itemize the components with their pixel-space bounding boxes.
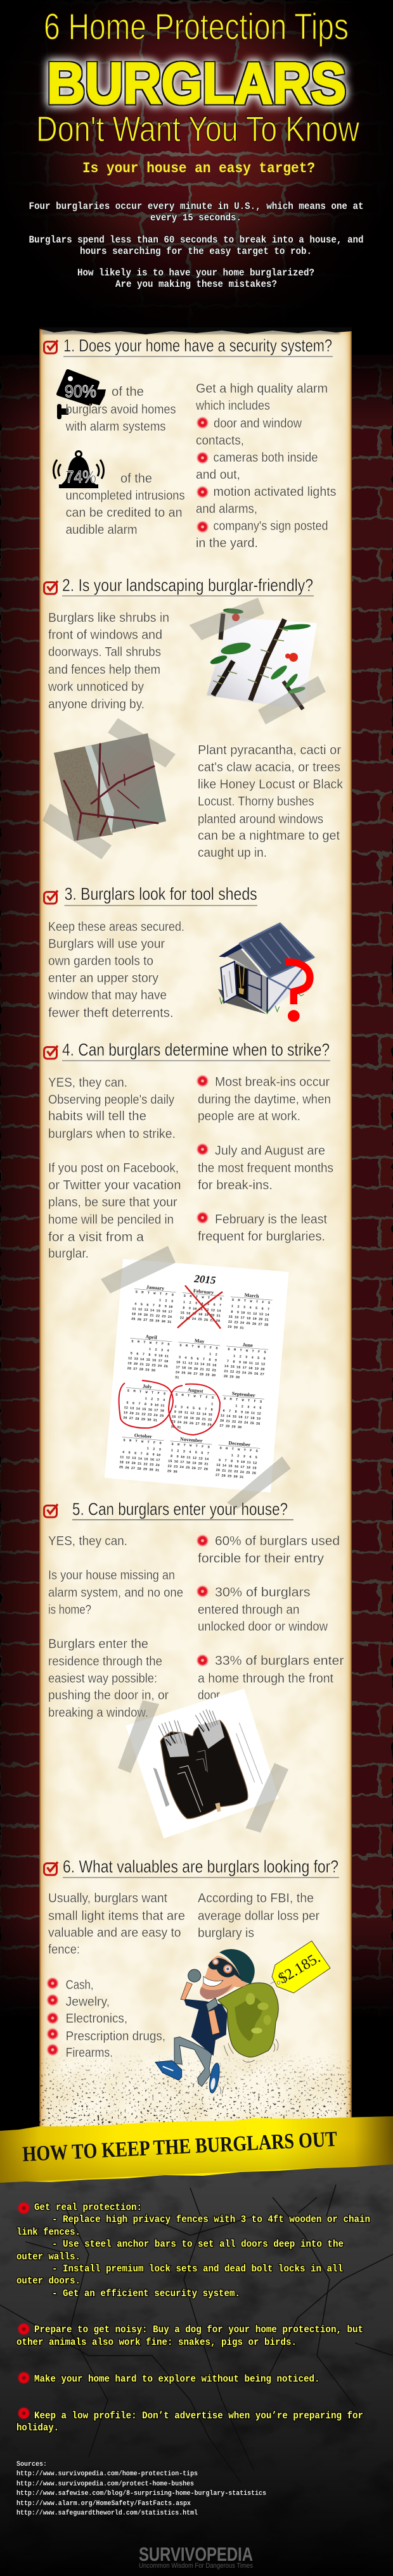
stat text: uncompleted intrusions: audible alarm [66,523,138,537]
text: plant pyracantha: can be a nightmare to get [198,829,340,843]
months row 1: 15 16 17 18 19 20 21 [178,1311,221,1318]
text: shrubs [48,611,169,712]
text: FBI average loss [198,1891,319,1940]
list: valuables: Electronics, [66,2012,127,2026]
title word: BURGLARS: BURGLARS [47,51,346,116]
list: valuables: Firearms. [66,2046,113,2060]
months row 1: S M T W T F S [131,1290,174,1297]
months row 2: June [242,1342,254,1348]
list: alarm features: motion activated lights [213,485,336,499]
months row 4: November [180,1436,203,1444]
tip 4: low profile [16,2407,363,2434]
heading 5: 5. Can burglars enter your house? [72,1500,288,1518]
months row 1: 22 23 24 25 26 27 28 [226,1320,268,1327]
list: alarm features: cameras both inside [213,451,318,465]
list: alarm features: in the yard. [196,536,258,550]
list: break-in timing: July and August are [215,1144,325,1158]
months row 1: 8 9 10 11 12 13 14 [227,1310,270,1317]
list: entry statistics: a home through the front [198,1672,333,1686]
tip 1: real protection: outer walls. [16,2251,81,2263]
months row 3: 26 27 28 29 30 31 [121,1416,157,1423]
tip 4: low profile: Keep a low profile: Don’t advertise when you’re preparing for [34,2410,363,2421]
months row 3 [120,1382,265,1436]
tape: lock pick right [246,1763,288,1833]
text: how burglars enter [48,1534,183,1720]
tip 2: get noisy: Prepare to get noisy: Buy a dog for your home protection, but [34,2324,363,2335]
months row 2: 19 20 21 22 23 24 25 [126,1361,168,1368]
months row 3: 16 17 18 19 20 21 22 [169,1415,212,1422]
text: shrubs: front of windows and [48,628,162,642]
months row 4: S M T W T F S [216,1446,259,1453]
text: yes they can: home will be penciled in [48,1213,174,1227]
months row 3: S M T W T F S [171,1392,214,1400]
intro text: Are you making these mistakes? [115,279,277,290]
text: how burglars enter: breaking a window. [48,1706,148,1720]
months row 4: 15 16 17 18 19 20 21 [166,1459,209,1467]
months row 3: September [232,1391,255,1398]
list: valuables: Jewelry, [66,1995,110,2009]
months row 2 [125,1332,269,1387]
text: tool sheds: own garden tools to [48,954,153,968]
text: how burglars enter: residence through the [48,1655,162,1669]
months row 2: 26 27 28 29 30 [125,1367,155,1373]
text: how burglars enter: YES, they can. [48,1534,127,1548]
months row 2: April [145,1334,158,1341]
months row 4: 18 19 20 21 22 23 24 [117,1460,160,1467]
panel: section 3 tool sheds [44,884,314,1022]
logo: Survivopedia [139,2543,253,2570]
months row 1: 1 2 3 4 5 6 7 [179,1300,221,1308]
intro text: Four burglaries occur every minute in U.S., which means one at [29,201,364,212]
months row 2: 31 [173,1375,179,1380]
logo: Survivopedia: SURVIVOPEDIA [139,2543,253,2565]
text: tool sheds: Burglars will use your [48,937,165,951]
heading 3: 3. Burglars look for tool sheds [65,884,257,904]
months row 1: 22 23 24 25 26 27 28 [177,1316,220,1323]
months row 4: 29 30 [165,1469,177,1474]
text: yes they can: plans, be sure that your [48,1196,177,1209]
months row 2: 5 6 7 8 9 10 11 [126,1351,169,1358]
stat text: burglars avoid homes [65,385,176,434]
months row 1: February [193,1288,214,1296]
photo: lock pick set [126,1689,279,1838]
months row 1: 8 9 10 11 12 13 14 [179,1306,221,1313]
months row 1: 25 26 27 28 29 30 31 [129,1317,172,1324]
months row 1: 29 30 31 [226,1325,244,1330]
months row 3: 1 [171,1399,214,1406]
text: plant pyracantha: planted around windows [198,812,323,826]
panel: section 5 entering the house [44,1500,344,1838]
months row 3: 20 21 22 23 24 25 26 [218,1418,261,1426]
list: valuables: Cash, [66,1978,94,1992]
panel: section 1 security system [44,336,336,550]
tape: plant photo bottom [258,676,326,724]
panel: section 6 valuables [39,1857,352,2140]
tip 2: get noisy [16,2323,363,2348]
price tag [272,1941,330,1993]
sources list: http://www.safewise.com/blog/8-surprising-home-burglary-statistics [16,2490,266,2497]
text: plant pyracantha [198,743,344,860]
logo: Survivopedia: Uncommon Wisdom For Dangerous Times [139,2562,253,2570]
list: entry statistics: unlocked door or window [198,1620,328,1634]
months row 4: October [134,1432,153,1439]
months row 1: S M T W T F S [179,1294,222,1301]
list: entry statistics: 33% of burglars enter [215,1654,344,1668]
photo: thorn branch [54,733,166,841]
tip 1: real protection: - Install premium lock sets and dead bolt locks in all [52,2263,343,2275]
banner heading: HOW TO KEEP THE BURGLARS OUT [22,2128,338,2166]
months row 3: 19 20 21 22 23 24 25 [121,1411,164,1418]
months row 2: S M T W T F S [176,1343,219,1351]
months row 3: 1 2 3 4 5 [219,1403,262,1410]
months row 4: S M T W T F S [119,1438,162,1446]
list: valuables: Prescription drugs, [66,2030,165,2043]
heading 6: 6. What valuables are burglars looking for? [63,1857,338,1876]
list: break-in timing: during the daytime, when [198,1093,331,1107]
tape: thorn photo top [108,718,176,767]
stat text: burglars avoid homes: burglars avoid homes [66,403,176,417]
text: how burglars enter: alarm system, and no one [48,1586,183,1600]
heading 4: 4. Can burglars determine when to strike? [62,1040,330,1059]
price tag: $2.185. [276,1950,323,1987]
months row 2: 1 2 3 4 5 6 [223,1353,266,1361]
tape: lock pick left [118,1700,159,1773]
months row 3: 6 7 8 9 10 11 12 [219,1408,261,1416]
intro text: How likely is to have your home burglarized? [77,267,314,279]
tape: plant photo top [189,598,264,640]
stat text: uncompleted intrusions: can be credited to an [66,506,183,520]
list: entry statistics: entered through an [198,1603,299,1617]
intro text: every 15 seconds. [150,212,242,224]
intro text [29,201,364,290]
text: how burglars enter: pushing the door in, or [48,1688,169,1702]
tip 1: real protection: - Replace high privacy fences with 3 to 4ft wooden or chain [52,2214,370,2225]
text: how burglars enter: is home? [48,1603,91,1617]
months row 4: 8 9 10 11 12 13 14 [166,1454,209,1462]
stat text: uncompleted intrusions [66,472,185,537]
tip 4: low profile: holiday. [16,2422,59,2434]
months row 3: 27 28 29 30 [217,1424,242,1429]
tip 2: get noisy: other animals also work fine: snakes, pigs or birds. [16,2337,297,2348]
stat: 74%: 74% [65,467,96,486]
months row 2: 1 2 3 4 [127,1346,170,1353]
tip 1: real protection [16,2202,370,2299]
text: plant pyracantha: cat's claw acacia, or trees [198,761,340,774]
months row 2: S M T W T F S [224,1347,267,1354]
months row 1: 15 16 17 18 19 20 21 [226,1315,269,1322]
months row 4: S M T W T F S [167,1442,210,1449]
tip 1: real protection: link fences. [16,2226,81,2238]
months row 2: 24 25 26 27 28 29 30 [173,1370,216,1378]
months row 1: S M T W T F S [228,1297,271,1305]
months row 4: 1 2 3 4 5 6 7 [167,1448,209,1456]
list: entry statistics: door [198,1688,220,1702]
red circle around August [169,1384,220,1435]
months row 4: 1 2 3 [119,1444,161,1451]
sources list [16,2461,266,2517]
text: shrubs: Burglars like shrubs in [48,611,169,625]
text: yes they can: If you post on Facebook, [48,1161,179,1175]
months row 1: March [244,1292,259,1299]
panel: section 2 landscaping [42,575,344,860]
heading 2: 2. Is your landscaping burglar-friendly? [62,575,313,595]
tip 1: real protection: - Get an efficient security system. [52,2288,240,2299]
banner: yellow tape [0,2116,393,2183]
text: yes they can: for a visit from a [48,1230,145,1244]
text: plant pyracantha: caught up in. [198,846,267,860]
months row 1: 1 2 3 4 5 6 7 [227,1304,269,1311]
panel: header title block [29,6,364,290]
months row 4: 1 2 3 4 5 [215,1453,257,1460]
text: yes they can: burglars when to strike. [48,1127,176,1141]
months row 3: 12 13 14 15 16 17 18 [122,1406,164,1413]
red cross over February [177,1285,222,1329]
months row 4: 20 21 22 23 24 25 26 [214,1468,256,1475]
panel: protection tips [16,2202,370,2434]
months row 3: 23 24 25 26 27 28 29 [169,1420,212,1427]
text: FBI average loss: According to FBI, the [198,1891,314,1905]
stat text: uncompleted intrusions: of the [120,472,152,486]
stat text: burglars avoid homes: with alarm systems [65,420,166,434]
list: break-in timing: frequent for burglaries. [198,1230,325,1244]
months row 3: August [188,1387,203,1394]
tape: calendar bottom [227,1456,291,1509]
months row 2: 1 2 [175,1349,217,1357]
text: shrubs: doorways. Tall shrubs [48,645,161,659]
text: yes they can: Observing people's daily [48,1093,174,1107]
photo: thorny flowering plant [207,608,317,709]
list: alarm features: which includes [195,399,270,413]
months row 2: 10 11 12 13 14 15 16 [174,1360,217,1368]
months row 2: May [195,1338,205,1344]
paper specks [39,2054,352,2126]
text: small light items: valuable and are easy to [48,1926,181,1940]
months row 2: 17 18 19 20 21 22 23 [174,1365,216,1373]
list: entry statistics: 60% of burglars used [215,1534,340,1548]
months row 3: S M T W T F S [123,1389,166,1396]
list: alarm features [195,382,336,550]
sources list: http://www.alarm.org/HomeSafety/FastFacts.aspx [16,2500,191,2508]
text: plant pyracantha: like Honey Locust or Black [198,778,344,792]
list: alarm features: company's sign posted [213,519,328,533]
heading 3 [44,884,257,906]
text: plant pyracantha: Locust. Thorny bushes [198,795,314,809]
months row 3: July [143,1383,152,1390]
months row 4: December [228,1440,251,1448]
months row 3: 13 14 15 16 17 18 19 [218,1413,261,1421]
icon: security camera [57,371,106,419]
text: small light items [48,1891,185,1957]
months row 2: S M T W T F S [127,1339,171,1347]
list: valuables [46,1977,165,2060]
months row 1 [129,1283,273,1332]
months row 2: 14 15 16 17 18 19 20 [222,1364,265,1372]
months row 4: 27 28 29 30 31 [213,1473,243,1479]
months row 2: 3 4 5 6 7 8 9 [174,1355,217,1363]
text: shrubs: anyone driving by. [48,698,145,712]
text: yes they can: habits will tell the [48,1109,146,1123]
tape: calendar top [101,1246,176,1293]
text: tool sheds [48,920,184,1020]
months row 3: 5 6 7 8 9 10 11 [122,1401,165,1408]
months row 4: 13 14 15 16 17 18 19 [214,1463,257,1470]
list: break-in timing: February is the least [215,1213,327,1227]
panel: cracked concrete footer background [0,2159,393,2576]
panel: section 4 when to strike [44,1040,333,1509]
intro text: Burglars spend less than 60 seconds to break into a house, and [29,234,364,246]
months row 1: January [146,1284,165,1291]
red circle around July [119,1380,173,1428]
list: alarm features: and out, [196,468,240,482]
months row 4: 4 5 6 7 8 9 10 [118,1450,160,1457]
tip 1: real protection: Get real protection: [34,2202,142,2213]
months row 3: 30 31 [169,1425,181,1430]
months row 1: 1 2 3 [131,1296,173,1303]
icon: ringing bell [53,451,104,488]
text: shrubs: work unnoticed by [48,680,144,694]
sources list: http://www.survivopedia.com/protect-home-bushes [16,2480,194,2488]
text: small light items: fence: [48,1943,80,1957]
text: plant pyracantha: Plant pyracantha, cacti or [198,743,341,757]
text: small light items: Usually, burglars want [48,1891,167,1905]
tip 3: hard to explore: Make your home hard to explore without being noticed. [34,2373,319,2385]
text: how burglars enter: easiest way possible: [48,1672,157,1686]
list: entry statistics: forcible for their entry [198,1551,324,1565]
list: break-in timing [196,1075,333,1244]
text: yes they can: YES, they can. [48,1076,127,1090]
months row 4: 25 26 27 28 29 30 31 [117,1465,159,1472]
months row 2: 12 13 14 15 16 17 18 [126,1356,169,1363]
list: break-in timing: Most break-ins occur [215,1075,330,1089]
text: small light items: small light items that are [48,1909,185,1923]
months row 1: 11 12 13 14 15 16 17 [130,1307,172,1314]
calendar 2015: 2015 [193,1273,217,1286]
text: FBI average loss: average dollar loss per [198,1909,319,1923]
stat text: uncompleted intrusions: uncompleted intrusions [66,489,185,503]
text: yes they can: burglar. [48,1247,89,1261]
list: entry statistics [196,1534,344,1702]
list: alarm features: Get a high quality alarm [196,382,328,396]
months row 1: 4 5 6 7 8 9 10 [131,1302,173,1309]
text: how burglars enter: Burglars enter the [48,1638,148,1651]
months row 2: 21 22 23 24 25 26 27 [222,1369,264,1377]
months row 3: 2 3 4 5 6 7 8 [171,1405,213,1412]
tip 1: real protection: outer doors. [16,2275,81,2287]
icon: garden shed with question mark [218,923,314,1022]
stat: 90%: 90% [65,382,96,401]
illustration: running burglar with sack [155,1949,278,2094]
list: break-in timing: the most frequent months [198,1161,333,1175]
list: alarm features: door and window [214,417,302,431]
subtitle question: Is your house an easy target? [82,160,315,177]
months row 4 [117,1431,261,1481]
intro text: hours searching for the easy target to rob. [80,246,312,257]
list: break-in timing: for break-ins. [198,1178,273,1192]
stat text: burglars avoid homes: of the [112,385,144,399]
text: tool sheds: enter an upper story [48,971,158,985]
text: how burglars enter: Is your house missing an [48,1569,175,1582]
paper mottling [44,336,347,2134]
list: alarm features: contacts, [196,434,244,448]
text: tool sheds: fewer theft deterrents. [48,1006,174,1020]
list: break-in timing: people are at work. [198,1109,300,1123]
text: yes they can: or Twitter your vacation [48,1178,181,1192]
torn paper edge [39,327,352,334]
list: alarm features: and alarms, [196,502,257,516]
text: shrubs: and fences help them [48,663,160,677]
months row 4: 6 7 8 9 10 11 12 [214,1458,257,1465]
months row 3: 1 2 3 4 [122,1395,165,1403]
tip 1: real protection: - Use steel anchor bars to set all doors deep into the [52,2238,344,2250]
calendar 2015 [105,1259,289,1493]
months row 4: 22 23 24 25 26 27 28 [165,1464,208,1472]
text: tool sheds: window that may have [48,988,167,1002]
text: yes they can [48,1076,181,1261]
months row 4: 11 12 13 14 15 16 17 [118,1455,160,1462]
sources list: Sources: [16,2461,47,2468]
panel: aged paper sheet [39,329,352,2140]
months row 3: S M T W T F S [219,1397,262,1404]
sources list: http://www.safeguardtheworld.com/statistics.html [16,2510,198,2517]
text: FBI average loss: burglary is [198,1926,254,1940]
months row 2: 7 8 9 10 11 12 13 [222,1359,265,1367]
list: entry statistics: 30% of burglars [215,1586,311,1600]
tape: thorn photo bottom [42,804,112,859]
months row 3: 9 10 11 12 13 14 15 [170,1410,212,1417]
months row 2: 28 29 30 [221,1374,240,1380]
months row 1: 18 19 20 21 22 23 24 [129,1312,172,1319]
sources list: http://www.survivopedia.com/home-protection-tips [16,2470,198,2478]
text: tool sheds: Keep these areas secured. [48,920,184,934]
